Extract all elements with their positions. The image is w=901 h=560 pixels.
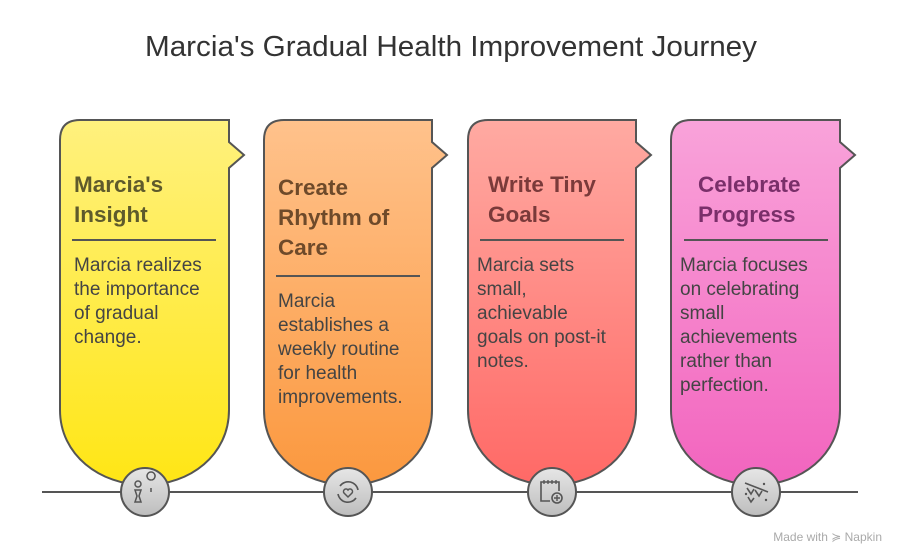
- panel: Marcia's Insight: Insight: [74, 202, 148, 227]
- panel: Write Tiny Goals: Marcia sets: [477, 255, 574, 276]
- panel: Celebrate Progress: perfection.: [680, 375, 769, 396]
- panel: Create Rhythm of Care: Rhythm of: [278, 205, 390, 230]
- panel: Celebrate Progress: Celebrate: [698, 172, 801, 197]
- panel: Write Tiny Goals: goals on post-it: [477, 327, 607, 348]
- icon: person with idea: [121, 468, 169, 516]
- panel: Celebrate Progress: Progress: [698, 202, 796, 227]
- panel: Celebrate Progress: rather than: [680, 351, 772, 372]
- panel: Write Tiny Goals: Goals: [488, 202, 551, 227]
- panel: Celebrate Progress: [671, 120, 855, 485]
- panel: Write Tiny Goals: Write Tiny: [488, 172, 596, 197]
- panel: Create Rhythm of Care: establishes a: [278, 315, 389, 336]
- timeline line: [42, 491, 858, 493]
- panel: Create Rhythm of Care: Create: [278, 175, 348, 200]
- panel: Marcia's Insight: [60, 120, 244, 485]
- icon: calendar add: [528, 468, 576, 516]
- panel: Create Rhythm of Care: [264, 120, 447, 485]
- panel: Celebrate Progress: on celebrating: [680, 279, 799, 300]
- panel: Create Rhythm of Care: Marcia: [278, 291, 335, 312]
- panel: Marcia's Insight: Marcia's: [74, 172, 163, 197]
- panel: Celebrate Progress: Marcia focuses: [680, 255, 808, 276]
- panel: Write Tiny Goals: notes.: [477, 351, 529, 372]
- panel: Marcia's Insight: of gradual: [74, 303, 159, 324]
- icon: party: [732, 468, 780, 516]
- panel: Marcia's Insight: Marcia realizes: [74, 255, 202, 276]
- panel: Write Tiny Goals: small,: [477, 279, 527, 300]
- title: Marcia's Gradual Health Improvement Journey: [145, 31, 758, 63]
- panel: Write Tiny Goals: achievable: [477, 303, 568, 324]
- panel: Create Rhythm of Care: Care: [278, 235, 328, 260]
- icon: heart cycle: [324, 468, 372, 516]
- panel: Celebrate Progress: small: [680, 303, 724, 324]
- panel: Create Rhythm of Care: weekly routine: [277, 339, 399, 360]
- panel: Marcia's Insight: the importance: [74, 279, 200, 300]
- footer credit: Made with ≽ Napkin: [773, 530, 882, 544]
- panel: Marcia's Insight: change.: [74, 327, 142, 348]
- panel: Create Rhythm of Care: improvements.: [278, 387, 403, 408]
- panel: Create Rhythm of Care: for health: [278, 363, 357, 384]
- panel: Write Tiny Goals: [468, 120, 651, 485]
- panel: Celebrate Progress: achievements: [680, 327, 797, 348]
